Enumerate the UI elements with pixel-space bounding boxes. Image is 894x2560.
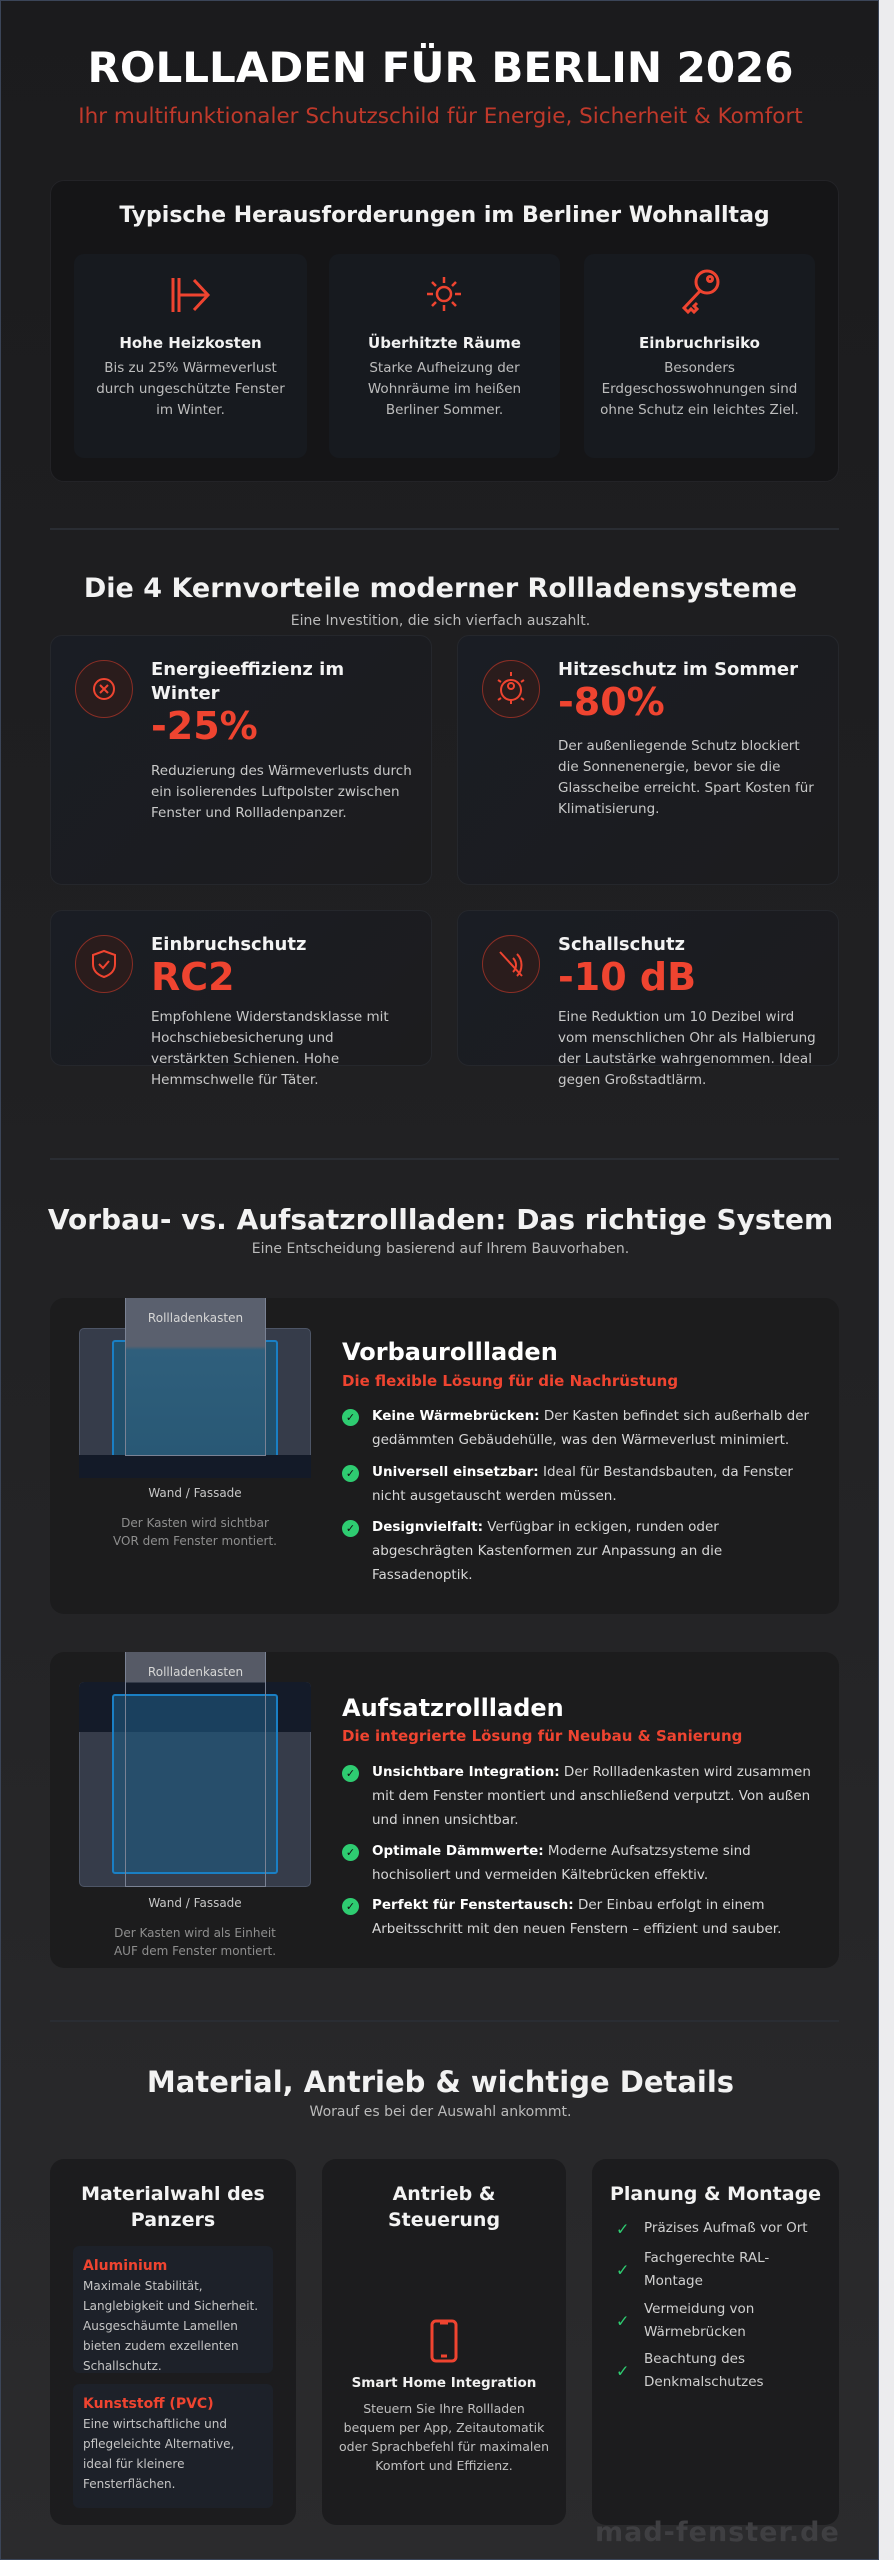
diagram: aufsatz: Der Kasten wird als Einheit (114, 1926, 276, 1940)
text: Besonders Erdgeschosswohnungen sind ohne Schutz ein leichtes Ziel. (600, 360, 799, 418)
diagram: vorbau: VOR dem Fenster montiert. (113, 1534, 277, 1548)
list items: ✓ (346, 1411, 355, 1424)
text: Überhitzte Räume (368, 334, 521, 352)
title (151, 659, 344, 704)
heading: Vorbau vs Aufsatz: Vorbau- vs. Aufsatzrollladen: Das richtige System (48, 1203, 833, 1236)
text: Smart Home Integration (352, 2375, 536, 2391)
title: Einbruchschutz (151, 934, 306, 955)
description: Reduzierung des Wärmeverlusts durch ein isolierendes Luftpolster zwischen Fenster und Rollladenpanzer. (151, 763, 412, 821)
title: Winter (151, 683, 220, 704)
checklist: Fachgerechte RAL-Montage (644, 2250, 769, 2289)
diagram: aufsatz: Wand / Fassade (148, 1896, 242, 1910)
text (96, 334, 285, 418)
panel: Aufsatzrollladen: ✓ (346, 1900, 355, 1913)
title (81, 2183, 265, 2231)
watermark: mad-fenster.de (595, 2517, 840, 2548)
diagram: aufsatz: Rollladenkasten (148, 1665, 243, 1679)
title: Vorbaurollladen (342, 1338, 558, 1366)
diagram: vorbau (79, 1298, 311, 1548)
panel: Aufsatzrollladen: Perfekt für Fenstertausch: Der Einbau erfolgt in einem Arbeitsschritt mit den neuen Fenstern – effizient und sauber. (372, 1897, 781, 1937)
description: Der außenliegende Schutz blockiert die Sonnenenergie, bevor sie die Glasscheibe erreicht. Spart Kosten für Klimatisierung. (558, 738, 814, 817)
box: kunststoff: Kunststoff (PVC) (83, 2396, 214, 2412)
title: Planung & Montage (610, 2183, 821, 2205)
title: ROLLLADEN FÜR BERLIN 2026 (87, 43, 794, 92)
checklist: ✓ (616, 2312, 629, 2330)
list items: Unsichtbare Integration: Der Rollladenkasten wird zusammen mit dem Fenster montiert und anschließend verputzt. Von außen und innen unsichtbar. (372, 1764, 811, 1828)
diagram: aufsatz: AUF dem Fenster montiert. (114, 1944, 276, 1958)
checklist: Präzises Aufmaß vor Ort (644, 2220, 808, 2236)
checklist: ✓ (616, 2219, 629, 2238)
list items: Keine Wärmebrücken: Der Kasten befindet sich außerhalb der gedämmten Gebäudehülle, was den Wärmeverlust minimiert. (372, 1408, 809, 1448)
title (388, 2183, 500, 2231)
card: einbruchschutz (50, 910, 432, 1066)
checklist: Beachtung des Denkmalschutzes (644, 2351, 764, 2390)
icon: phone (430, 2320, 458, 2362)
title: Schallschutz (558, 934, 685, 955)
text: Steuern Sie Ihre Rollladen bequem per App, Zeitautomatik oder Sprachbefehl für maximalen Komfort und Effizienz. (339, 2401, 549, 2473)
list items: ✓ (346, 1767, 355, 1780)
panel: Vorbaurollladen (50, 1298, 839, 1614)
panel heading: Typische Herausforderungen im Berliner Wohnalltag (119, 203, 770, 228)
icon: sound off (482, 935, 540, 993)
text: Hohe Heizkosten (119, 334, 262, 352)
card: energie (50, 635, 432, 885)
title: Steuerung (388, 2209, 500, 2231)
checklist: ✓ (616, 2260, 629, 2280)
icon: heat arrow (172, 278, 210, 312)
number: -10 dB (558, 955, 696, 999)
card: heizkosten (74, 254, 307, 458)
checklist: ✓ (616, 2362, 629, 2380)
box: aluminium: Aluminium (83, 2258, 167, 2274)
text (368, 334, 521, 418)
text: Starke Aufheizung der Wohnräume im heißen Berliner Sommer. (368, 360, 521, 418)
heading: Kernvorteile: Die 4 Kernvorteile moderner Rollladensysteme (84, 573, 797, 604)
icon: key (682, 270, 720, 314)
panel: challenges (50, 180, 839, 482)
number: RC2 (151, 955, 235, 999)
title: Materialwahl des (81, 2183, 265, 2205)
title: Hitzeschutz im Sommer (558, 659, 798, 680)
panel: Vorbaurollladen: Designvielfalt: Verfügbar in eckigen, runden oder abgeschrägten Kastenformen zur Anpassung an die Fassadenoptik. (372, 1519, 722, 1583)
subheading: Eine Entscheidung basierend auf Ihrem Bauvorhaben. (252, 1241, 629, 1257)
card: hitze (329, 254, 560, 458)
subheading: Worauf es bei der Auswahl ankommt. (310, 2104, 571, 2120)
subtitle: Die flexible Lösung für die Nachrüstung (342, 1372, 678, 1390)
diagram: vorbau: Rollladenkasten (148, 1311, 243, 1325)
title: Antrieb & (393, 2183, 495, 2205)
panel: Vorbaurollladen: ✓ (346, 1467, 355, 1480)
column: Antrieb (322, 2159, 566, 2525)
column: Planung (592, 2159, 839, 2525)
text: Bis zu 25% Wärmeverlust durch ungeschützte Fenster im Winter. (96, 360, 285, 418)
card: schallschutz (457, 910, 839, 1066)
box: kunststoff: Eine wirtschaftliche und pflegeleichte Alternative, ideal für kleinere Fensterflächen. (83, 2417, 234, 2491)
panel: Vorbaurollladen: ✓ (346, 1522, 355, 1535)
diagram: vorbau: Der Kasten wird sichtbar (121, 1516, 269, 1530)
number: -25% (151, 704, 258, 748)
title: Energieeffizienz im (151, 659, 344, 680)
box: aluminium (73, 2246, 273, 2373)
card: hitzeschutz (457, 635, 839, 885)
diagram: vorbau: Wand / Fassade (148, 1486, 242, 1500)
text: Einbruchrisiko (639, 334, 760, 352)
card: einbruch (584, 254, 815, 458)
box: aluminium: Maximale Stabilität, Langlebigkeit und Sicherheit. Ausgeschäumte Lamellen bieten zudem exzellenten Schallschutz. (83, 2279, 258, 2373)
icon: sun (427, 277, 461, 311)
checklist (616, 2219, 808, 2390)
number: -80% (558, 680, 665, 724)
icon: sun virus (482, 660, 540, 718)
checklist: Vermeidung von Wärmebrücken (644, 2301, 754, 2340)
diagram: aufsatz (79, 1652, 311, 1958)
title: Panzers (131, 2209, 215, 2231)
heading: Material: Material, Antrieb & wichtige Details (147, 2065, 734, 2099)
description: Eine Reduktion um 10 Dezibel wird vom menschlichen Ohr als Halbierung der Lautstärke wahrgenommen. Ideal gegen Großstadtlärm. (558, 1009, 816, 1088)
panel: Aufsatzrollladen (50, 1652, 839, 1968)
panel: Vorbaurollladen: Universell einsetzbar: Ideal für Bestandsbauten, da Fenster nicht ausgetauscht werden müssen. (372, 1464, 793, 1504)
subheading: Eine Investition, die sich vierfach auszahlt. (291, 613, 590, 629)
description: Empfohlene Widerstandsklasse mit Hochschiebesicherung und verstärkten Schienen. Hohe Hemmschwelle für Täter. (151, 1009, 389, 1088)
icon: thermometer (75, 660, 133, 718)
panel: Aufsatzrollladen: ✓ (346, 1846, 355, 1859)
box: kunststoff (73, 2384, 273, 2508)
panel: Aufsatzrollladen: Optimale Dämmwerte: Moderne Aufsatzsysteme sind hochisoliert und vermeiden Kältebrücken effektiv. (372, 1843, 751, 1883)
title: Aufsatzrollladen (342, 1694, 564, 1722)
column: Materialwahl (50, 2159, 296, 2525)
text (600, 334, 799, 418)
subtitle: Die integrierte Lösung für Neubau & Sanierung (342, 1727, 742, 1745)
icon: shield (75, 935, 133, 993)
subtitle: Ihr multifunktionaler Schutzschild für Energie, Sicherheit & Komfort (78, 104, 803, 129)
